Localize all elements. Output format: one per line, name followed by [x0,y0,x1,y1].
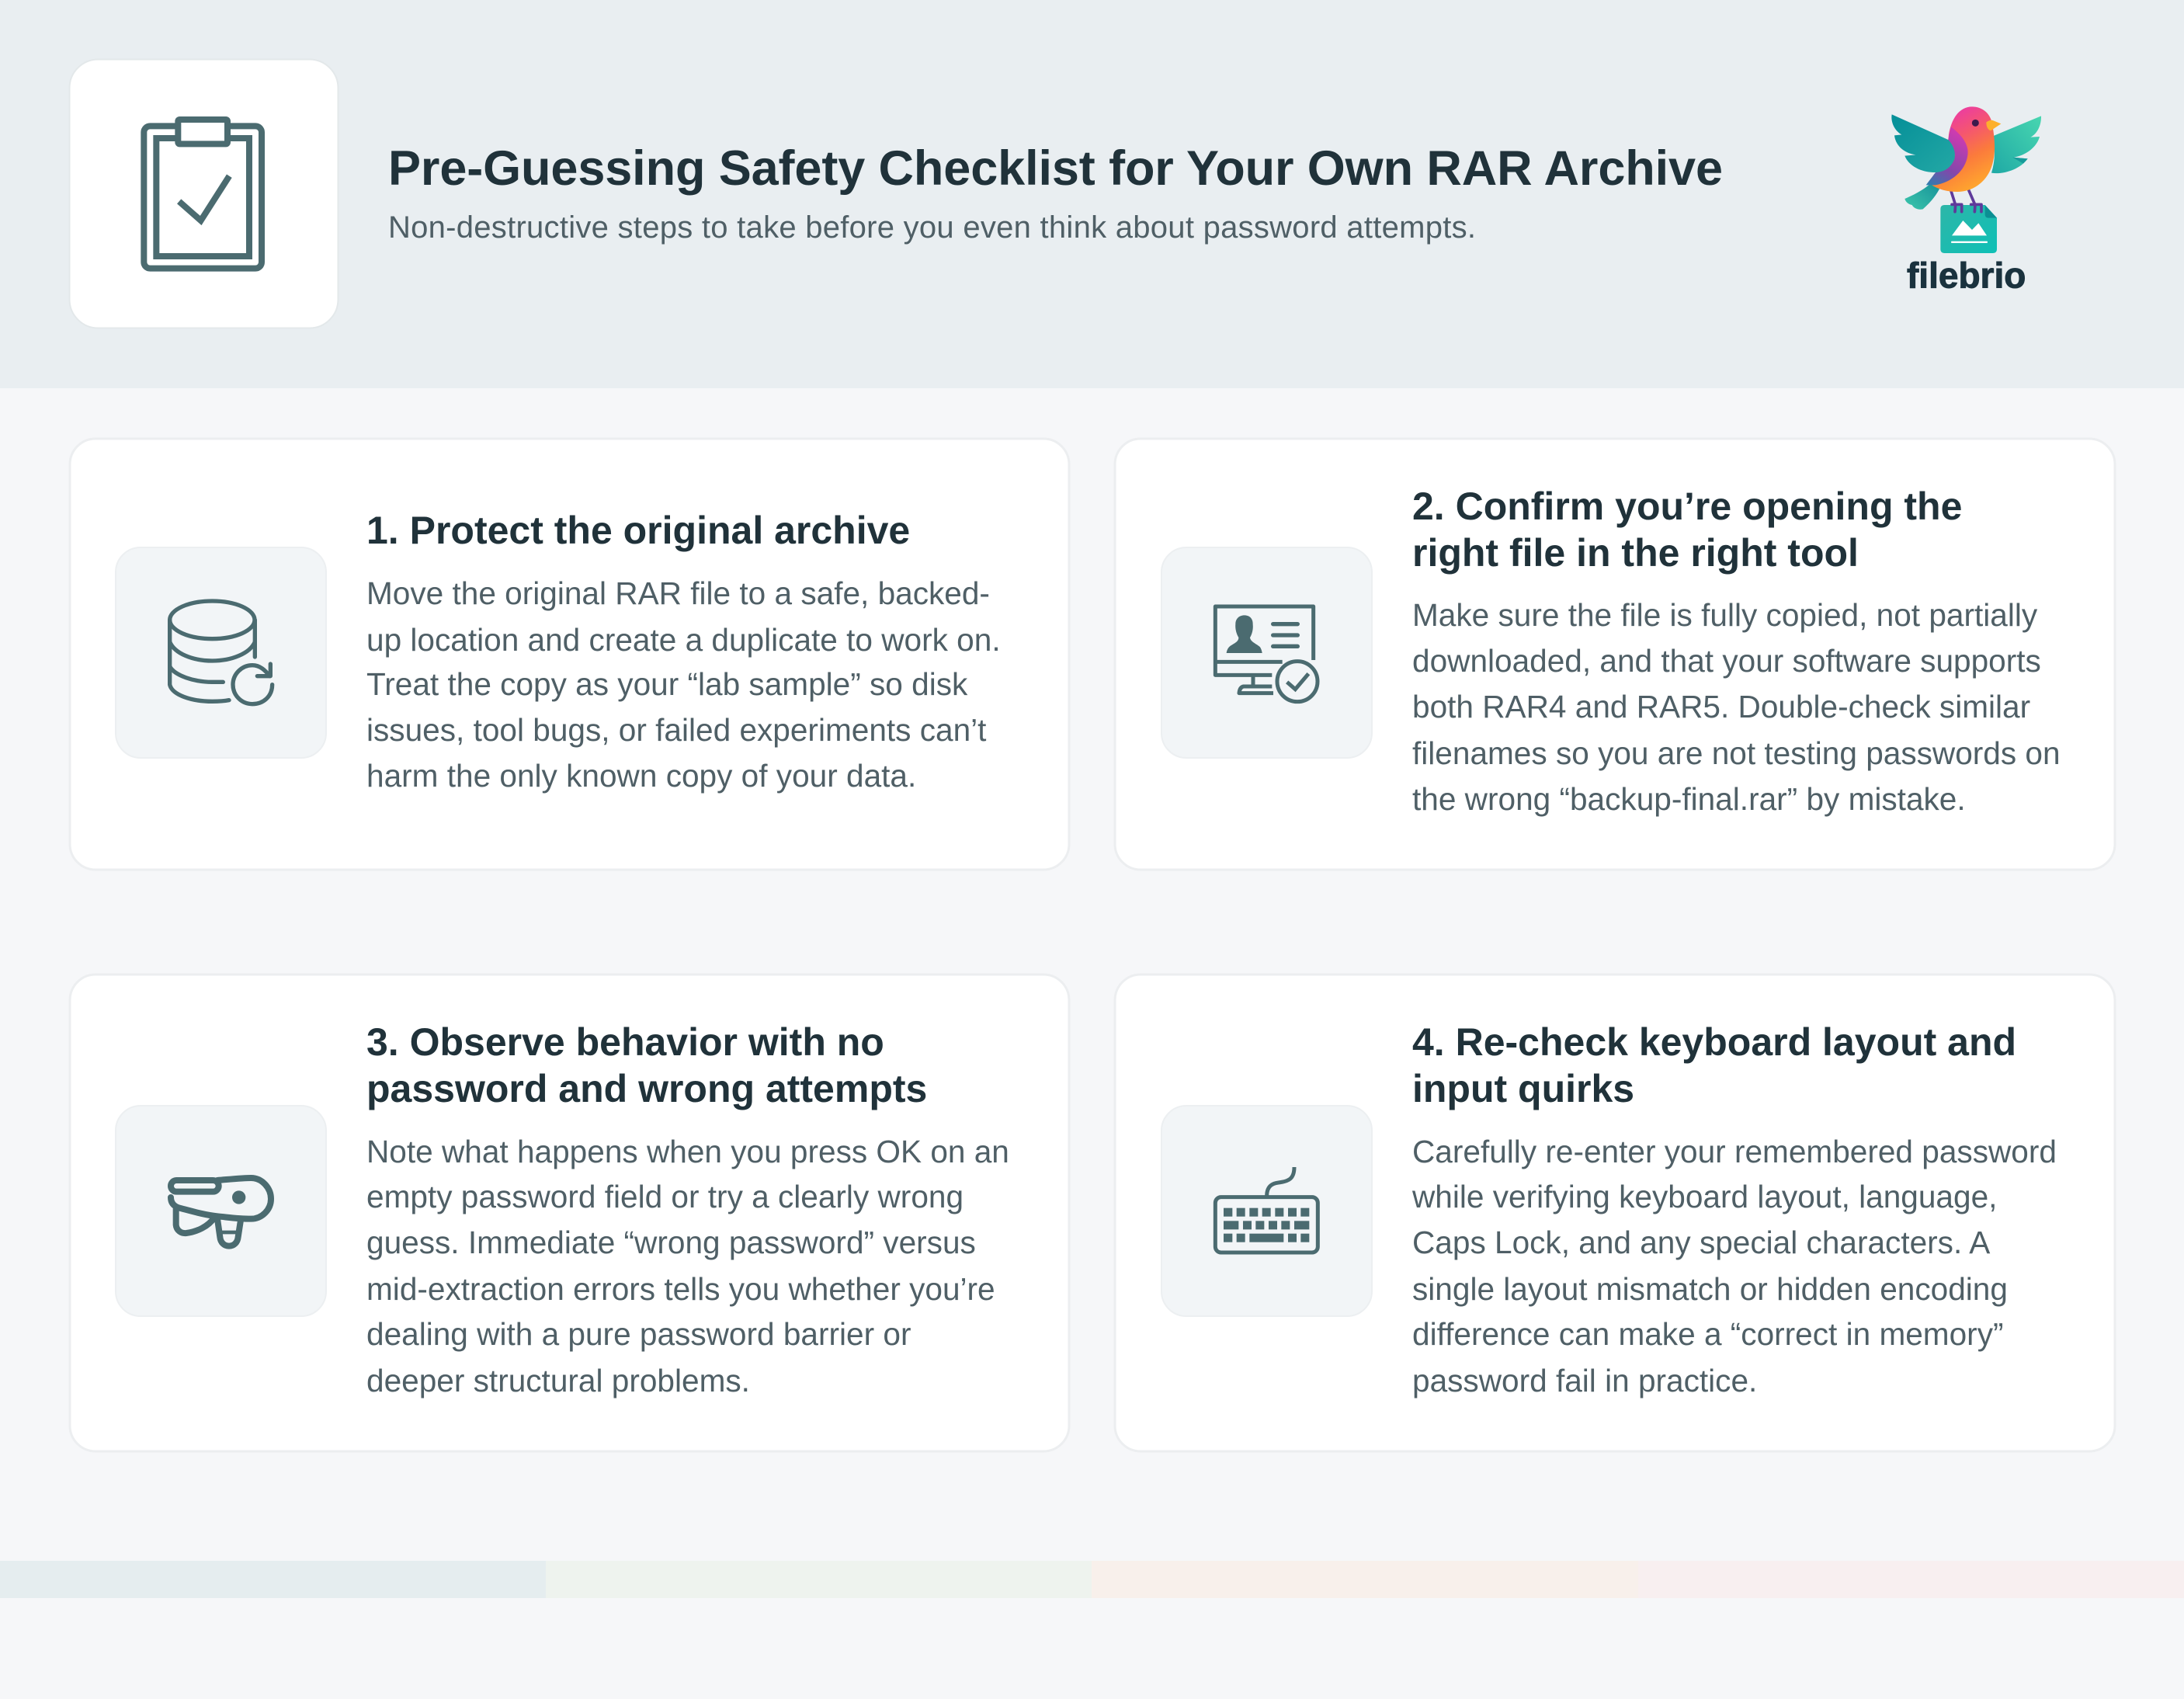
text block [366,1134,1009,1398]
icon: database with refresh [116,547,326,758]
text block: while verifying keyboard layout, language, [1411,1179,1997,1214]
text block [366,575,1001,794]
heading: 2. Confirm you’re opening the [1412,485,1962,528]
header band [0,0,2184,388]
text block: mid-extraction errors tells you whether you’re [366,1271,995,1307]
text block: password fail in practice. [1412,1363,1757,1398]
footer colour strip [0,1561,2184,1598]
icon: megaphone [116,1106,326,1316]
panel: 2 confirm the right file [1115,439,2115,870]
text block: up location and create a duplicate to work on. [366,622,1001,658]
text block: Caps Lock, and any special characters. A [1412,1225,1990,1260]
text block: Carefully re-enter your remembered password [1412,1134,2057,1169]
text block: Note what happens when you press OK on an [366,1134,1009,1169]
icon: bird legs [1951,189,1981,212]
icon: bird left wing [1891,114,1955,172]
heading: 1. Protect the original archive [366,509,910,552]
text block: downloaded, and that your software supports [1412,643,2041,679]
icon: bird shoulder band [1926,127,1968,185]
text block: guess. Immediate “wrong password” versus [366,1225,976,1260]
text block: harm the only known copy of your data. [366,758,916,794]
heading: 4. Re-check keyboard layout and [1412,1020,2016,1064]
icon: bird beak [1986,120,2001,130]
icon: keyboard [1161,1106,1372,1316]
icon: bird eye [1972,120,1979,127]
text block [1411,1134,2057,1398]
icon: clipboard with check [70,59,339,328]
text block: Move the original RAR file to a safe, backed- [366,575,990,611]
panel: 3 observe behavior [70,975,1069,1451]
heading [1412,1020,2016,1110]
text block: difference can make a “correct in memory” [1412,1316,2003,1352]
text block: single layout mismatch or hidden encoding [1412,1271,2008,1307]
text block: dealing with a pure password barrier or [366,1316,911,1352]
heading [1412,485,1962,575]
text block: empty password field or try a clearly wrong [366,1179,964,1214]
title: Pre-Guessing Safety Checklist for Your Own RAR Archive [388,141,1723,196]
text block: issues, tool bugs, or failed experiments can’t [366,712,986,748]
text block: the wrong “backup-final.rar” by mistake. [1412,781,1966,817]
panel: 1 protect the original archive [70,439,1069,870]
text block: deeper structural problems. [366,1363,750,1398]
icon: bird right wing [1991,116,2041,173]
icon: file with mountain image [1940,205,1997,253]
panel: 4 keyboard layout [1115,975,2115,1451]
heading: input quirks [1412,1067,1634,1110]
icon: monitor with user and check [1161,547,1372,758]
text block: Make sure the file is fully copied, not partially [1412,597,2038,633]
subtitle: Non-destructive steps to take before you even think about password attempts. [388,210,1476,245]
icon: bird tail [1904,181,1940,210]
icon: bird body [1931,106,1995,192]
heading: password and wrong attempts [366,1067,927,1110]
heading: 3. Observe behavior with no [366,1020,884,1064]
text block: filenames so you are not testing passwords on [1412,735,2061,771]
text block: both RAR4 and RAR5. Double-check similar [1412,689,2030,724]
logo wordmark: filebrio [1907,255,2026,296]
logo: filebrio bird [1891,106,2041,296]
heading: right file in the right tool [1412,531,1859,575]
text block [1412,597,2061,817]
heading [366,1020,927,1110]
text block: Treat the copy as your “lab sample” so disk [366,666,968,702]
